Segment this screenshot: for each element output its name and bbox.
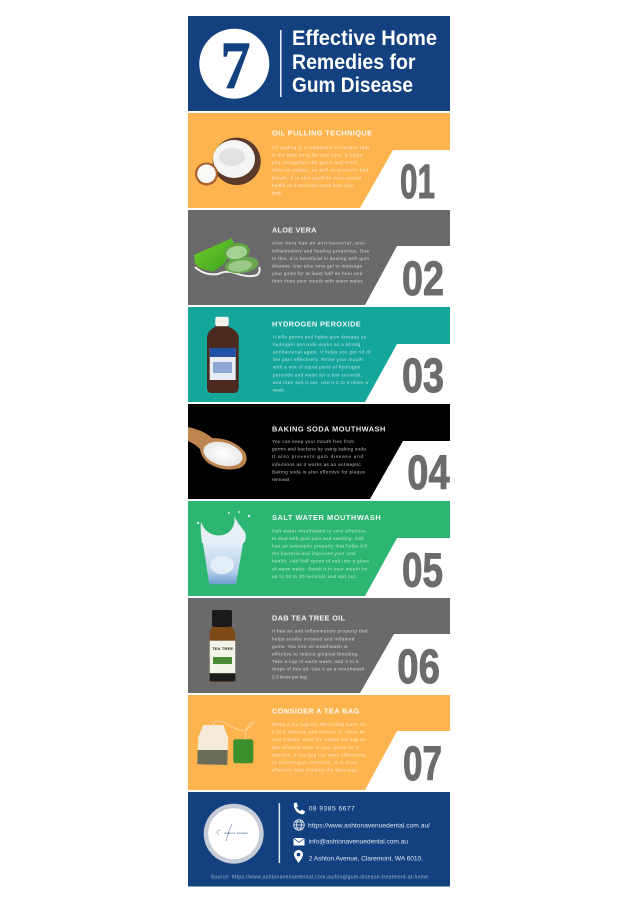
text block: infections as it works as an antiseptic. <box>272 462 362 467</box>
text block: Oil pulling is a traditional technique that <box>272 145 370 150</box>
icon: tea tree oil bottle: TEA TREE <box>212 646 233 651</box>
text block: removal. <box>272 477 290 482</box>
text block <box>272 439 367 482</box>
text block: 2 to 5 minutes and remove it. Allow to <box>272 730 364 735</box>
text block: helps soothe irritated and inflamed <box>272 636 355 641</box>
text block: effective than drinking the beverage. <box>272 768 359 773</box>
text block: effective to reduce gingival bleeding. <box>272 652 359 656</box>
panel: dab tea tree oil <box>188 598 450 694</box>
number seven badge: 7 <box>220 27 250 103</box>
icon: map pin <box>294 850 303 863</box>
text block: your gums for at least half an hour and <box>272 271 363 276</box>
text block: cool it down. Hold the cooled tea bag on <box>272 737 366 742</box>
icon: coconut <box>195 138 261 186</box>
text block: You can keep your mouth free from <box>272 439 354 444</box>
number 06: 06 <box>397 641 440 694</box>
heading: CONSIDER A TEA BAG <box>272 706 360 715</box>
contact: email: info@ashtonavenuedental.com.au <box>309 839 408 846</box>
heading: ALOE VERA <box>272 226 317 235</box>
text block: health as it removes toxins from your <box>272 183 354 188</box>
panel: oil pulling technique <box>188 113 450 209</box>
text block <box>272 528 370 579</box>
text block: reduces plaque, as well as prevents bad <box>272 168 368 173</box>
text block: drops of this oil. Use it as a mouthwash <box>272 667 365 672</box>
contact: phone: 08 9385 6677 <box>309 806 355 813</box>
heading: OIL PULLING TECHNIQUE <box>272 128 372 137</box>
icon: hydrogen peroxide bottle <box>207 317 239 393</box>
title <box>292 27 437 97</box>
text block: Steep a tea bag into the boiling water for <box>272 722 366 727</box>
logo badge <box>204 804 264 864</box>
text block: antibacterial agent. It helps you get rid of <box>273 350 371 354</box>
text block: health. Add half spoon of salt into a glass <box>272 559 370 564</box>
number 01: 01 <box>400 156 435 209</box>
text block <box>273 334 371 392</box>
text block <box>272 145 370 195</box>
text block: minutes. A tea bag can work effectively <box>272 752 366 757</box>
text block: Take a cup of warm water, add 3 to 4 <box>272 659 359 664</box>
text block: has an antiseptic property that helps kill <box>272 544 367 548</box>
header panel <box>188 16 450 111</box>
text block: inflammatory and healing properties. Due <box>272 248 369 253</box>
title: Remedies for <box>292 51 416 74</box>
icon: phone <box>294 802 305 814</box>
number 04: 04 <box>407 447 450 500</box>
icon: envelope <box>294 838 304 846</box>
text block: with a mix of equal parts of hydrogen <box>273 365 361 370</box>
text block: It also prevents gum disease and <box>272 454 363 459</box>
text block: It has an anti inflammatory property that <box>272 629 368 634</box>
number seven badge <box>199 27 269 103</box>
panel: aloe vera <box>188 210 450 306</box>
panel: hydrogen peroxide <box>188 307 450 403</box>
icon: aloe vera leaf <box>194 238 260 276</box>
text block: Aloe Vera has an anti-bacterial, anti- <box>272 241 367 246</box>
text block: week. <box>273 388 285 392</box>
text block <box>272 241 369 284</box>
text block: up to 20 to 30 seconds and spit out. <box>272 574 357 579</box>
text block: then rinse your mouth with warm water. <box>272 279 364 284</box>
text block: hydrogen peroxide works as a strong <box>273 342 361 347</box>
number 02: 02 <box>402 253 444 306</box>
heading: HYDROGEN PEROXIDE <box>272 319 361 328</box>
icon: tea tree oil bottle <box>210 610 236 682</box>
text block: the bacteria and improves your oral <box>272 551 355 556</box>
text block: It kills germs and fights gum disease as <box>273 334 367 339</box>
number 03: 03 <box>402 350 444 403</box>
text block: Baking soda is also effective for plaque <box>272 469 365 474</box>
text block: the pain effectively. Rinse your mouth <box>273 357 363 362</box>
text block: to deal with gum pain and swelling. Salt <box>272 536 364 541</box>
number 05: 05 <box>402 544 443 598</box>
text block: of warm water. Swish it in your mouth for <box>272 566 368 571</box>
panel: salt water mouthwash <box>188 501 450 598</box>
footer panel <box>188 792 450 886</box>
text block: to this, it is beneficial in dealing with gum <box>272 256 369 261</box>
text block: to relieve gum infection. It is more <box>272 760 358 765</box>
panel: baking soda mouthwash <box>188 404 450 500</box>
text block: peroxide and water for a few seconds, <box>273 372 362 377</box>
text block: germs and bacteria by using baking soda. <box>272 447 367 452</box>
contact: website: https://www.ashtonavenuedental.com.au/ <box>308 823 430 830</box>
logo badge: Ashton Avenue <box>224 831 248 835</box>
icon: glass of water <box>197 511 250 584</box>
heading: DAB TEA TREE OIL <box>272 613 345 622</box>
text block: body. <box>272 190 282 195</box>
text block: 2-3 times per day. <box>272 674 308 679</box>
text block: is the best thing for oral care. It helps <box>272 153 363 158</box>
icon: tea bag <box>197 721 254 765</box>
icon: wooden spoon with baking soda <box>188 427 247 470</box>
text block <box>272 629 368 679</box>
source line: Source: https://www.ashtonavenuedental.com.au/blog/gum-disease-treatment-at-home <box>211 875 428 881</box>
contact: address: 2 Ashton Avenue, Claremont, WA 6010. <box>309 855 423 862</box>
heading: BAKING SODA MOUTHWASH <box>272 425 385 434</box>
text block: gums. Tea tree oil mouthwash is <box>272 644 348 649</box>
text block: and then spit it out. Use it 2 to 3 times a <box>273 380 368 385</box>
title: Effective Home <box>292 27 437 50</box>
panel: consider a tea bag <box>188 695 450 791</box>
text block: breath. It is also good for your overall <box>272 175 361 180</box>
text block: you strengthen the gums and teeth, <box>272 160 359 165</box>
text block: the affected area of your gums for 5 <box>272 745 359 750</box>
icon: globe <box>294 820 304 830</box>
text block: Salt water mouthwash is very effective <box>272 528 366 533</box>
heading: SALT WATER MOUTHWASH <box>272 513 381 522</box>
title: Gum Disease <box>292 74 413 97</box>
text block <box>272 722 366 773</box>
number 07: 07 <box>403 738 442 791</box>
text block: disease. Use aloe vera gel to massage <box>272 264 362 268</box>
